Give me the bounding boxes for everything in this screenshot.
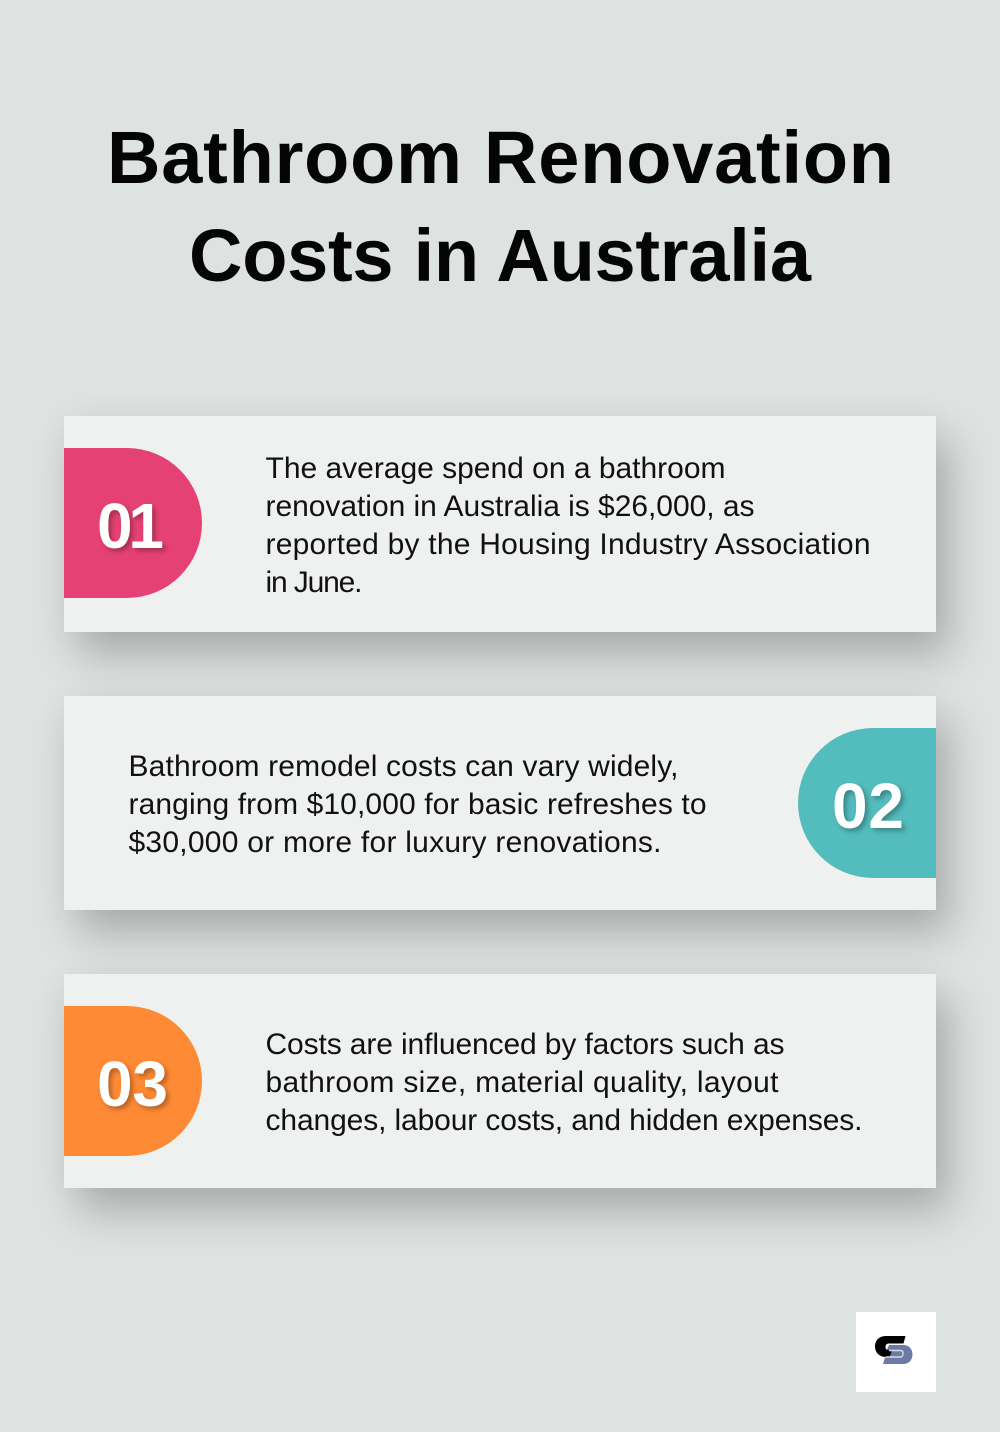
text: average spend [266, 452, 870, 599]
text: cost range: ranging from $10,000 for basic refreshes to [128, 788, 706, 821]
number: 01: 01 [97, 490, 164, 562]
text: average spend: in June. [266, 566, 362, 599]
text: cost factors [266, 1028, 862, 1137]
title: Bathroom Renovation [107, 116, 894, 199]
logo [856, 1312, 936, 1392]
text: cost range [128, 750, 706, 859]
panel: cost range [64, 696, 936, 910]
text: cost factors: changes, labour costs, and hidden expenses. [266, 1104, 862, 1137]
badge: 01 [64, 448, 202, 598]
logo: mark [875, 1336, 912, 1364]
text: average spend: The average spend on a bathroom [266, 452, 726, 485]
text: cost factors: bathroom size, material quality, layout [266, 1066, 779, 1099]
badge: 02 [798, 728, 936, 878]
panel: average spend [64, 416, 936, 632]
text: cost range: $30,000 or more for luxury renovations. [128, 826, 662, 859]
number: 03: 03 [97, 1048, 168, 1120]
badge: 03 [64, 1006, 202, 1156]
panel: cost factors [64, 974, 936, 1188]
text: average spend: reported by the Housing Industry Association [266, 528, 870, 561]
title [107, 116, 894, 297]
text: cost range: Bathroom remodel costs can vary widely, [128, 750, 678, 783]
text: cost factors: Costs are influenced by factors such as [266, 1028, 784, 1061]
number: 02: 02 [832, 770, 904, 842]
title: Costs in Australia [189, 214, 812, 297]
text: average spend: renovation in Australia is $26,000, as [266, 490, 754, 523]
